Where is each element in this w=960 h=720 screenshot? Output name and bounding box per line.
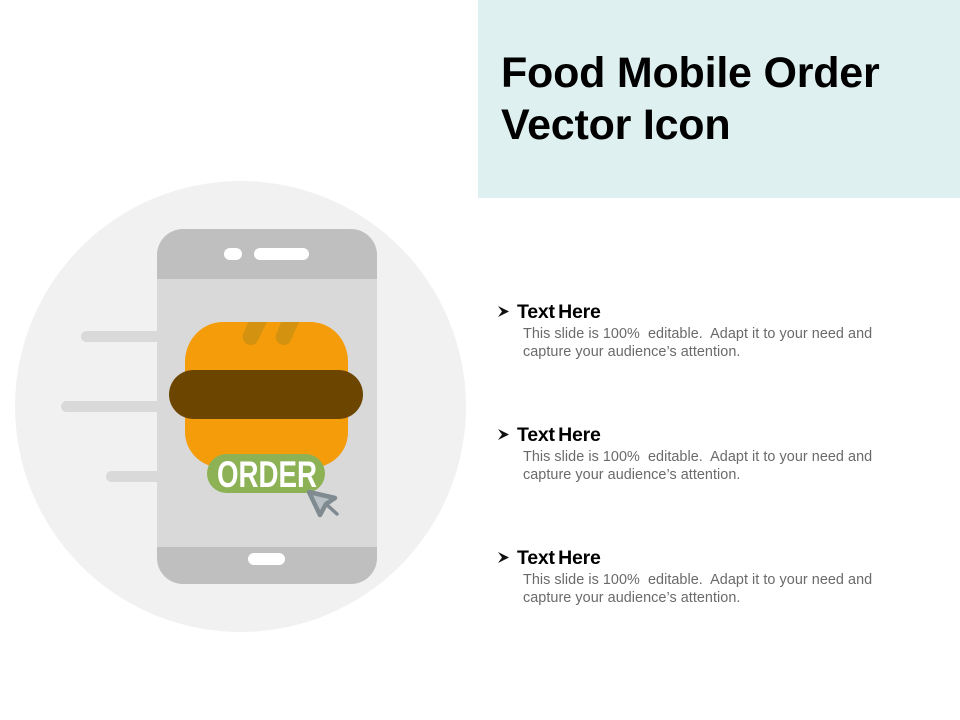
background circle — [15, 181, 466, 632]
bullet item 3 — [498, 547, 872, 606]
heading 2: Text Here — [517, 424, 601, 446]
body 3: capture your audience’s attention. — [523, 590, 740, 606]
phone — [157, 229, 377, 584]
body 2 — [523, 449, 872, 483]
body 2: capture your audience’s attention. — [523, 467, 740, 483]
illustration: food order phone — [15, 181, 466, 632]
order button: ORDER — [217, 454, 317, 495]
body 1: This slide is 100% editable. Adapt it to your need and — [523, 326, 872, 342]
panel: title background — [478, 0, 960, 198]
icon: burger — [169, 322, 363, 468]
body 2: This slide is 100% editable. Adapt it to your need and — [523, 449, 872, 465]
body 1: capture your audience’s attention. — [523, 344, 740, 360]
body 1 — [523, 326, 872, 360]
title — [501, 49, 880, 149]
heading 1: Text Here — [517, 301, 601, 323]
bullet item 2 — [498, 424, 872, 483]
title: Food Mobile Order — [501, 49, 879, 97]
icon: cursor — [309, 492, 337, 515]
arrow bullet 1 — [498, 306, 509, 317]
arrow bullet 3 — [498, 552, 509, 563]
arrow bullet 2 — [498, 429, 509, 440]
title: Vector Icon — [501, 101, 730, 149]
body 3 — [523, 572, 872, 606]
heading 3: Text Here — [517, 547, 601, 569]
bullet item 1 — [498, 301, 872, 360]
motion lines — [61, 331, 171, 482]
body 3: This slide is 100% editable. Adapt it to your need and — [523, 572, 872, 588]
